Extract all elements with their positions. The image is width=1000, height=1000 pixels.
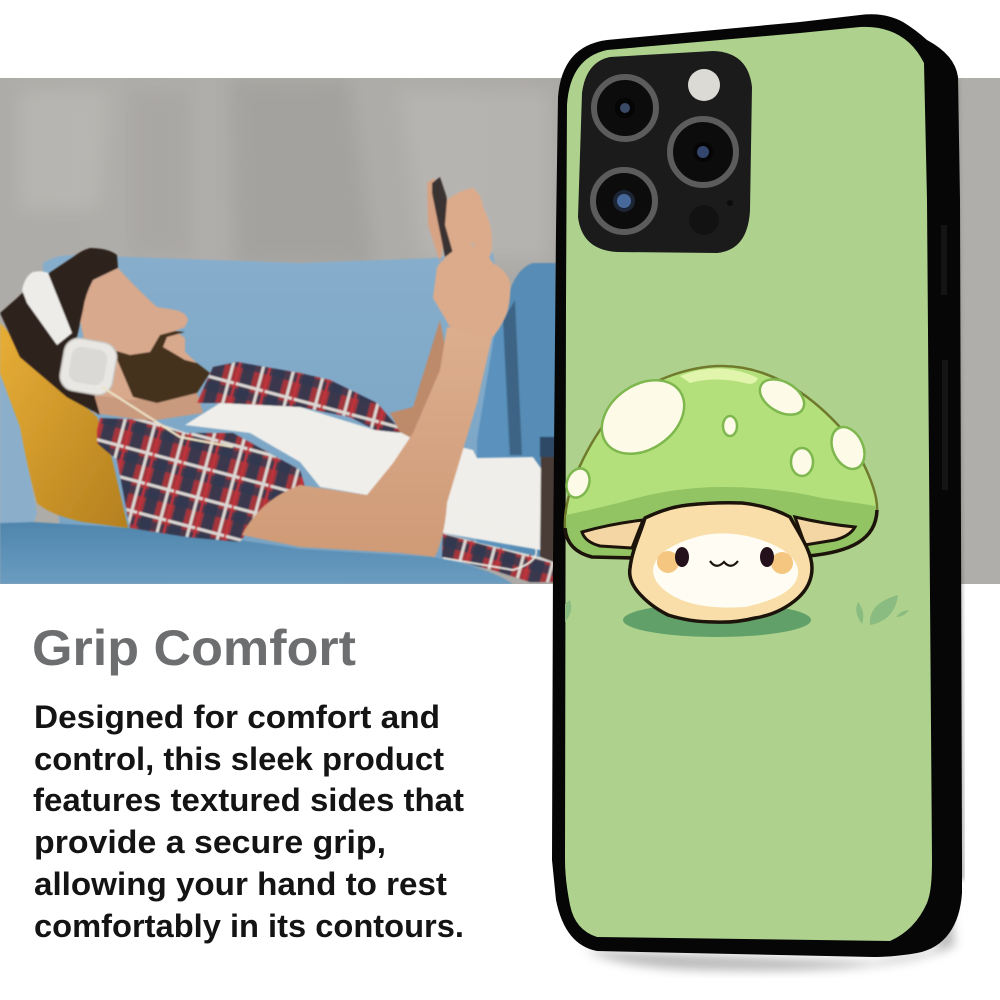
fist xyxy=(433,243,510,340)
description text xyxy=(33,699,464,944)
eyes xyxy=(675,547,689,567)
neck xyxy=(92,392,204,421)
sofa seat xyxy=(0,522,513,584)
description text: Designed for comfort and xyxy=(34,699,440,735)
case shadow xyxy=(585,900,955,971)
mushroom illustration xyxy=(563,365,909,637)
description text: comfortably in its contours. xyxy=(34,908,464,944)
sofa xyxy=(0,253,556,584)
sofa left arm xyxy=(0,373,37,525)
cable xyxy=(102,387,233,447)
front arm xyxy=(242,327,493,557)
head xyxy=(80,268,197,400)
cap lower outline xyxy=(565,510,877,558)
headphones xyxy=(22,271,233,447)
face highlight xyxy=(653,533,798,608)
headband xyxy=(22,271,72,345)
hair xyxy=(0,248,118,415)
cheeks xyxy=(657,551,679,573)
phone case xyxy=(552,14,964,971)
sofa armrest xyxy=(503,263,556,570)
lens bottom left xyxy=(593,170,655,232)
green back xyxy=(565,27,932,941)
description text: allowing your hand to rest xyxy=(34,866,447,902)
white t-shirt xyxy=(185,403,542,550)
lens right xyxy=(670,119,736,185)
beard xyxy=(113,331,210,403)
case body xyxy=(552,14,962,957)
cushion xyxy=(0,323,128,528)
fingers xyxy=(445,188,492,262)
right gill xyxy=(795,517,855,545)
microphone xyxy=(727,200,733,206)
dark jeans xyxy=(540,437,556,457)
cap highlight xyxy=(680,368,758,384)
camera module xyxy=(578,51,752,253)
heading: Grip Comfort xyxy=(32,620,356,676)
ear cup xyxy=(58,336,119,397)
description text: features textured sides that xyxy=(33,782,464,818)
plaid collar xyxy=(197,362,403,433)
description text: control, this sleek product xyxy=(34,741,444,777)
lens top left xyxy=(594,77,656,139)
cap spots xyxy=(563,365,871,501)
sofa back xyxy=(43,253,510,570)
smartphone xyxy=(432,177,457,257)
right edge shadow xyxy=(956,80,964,880)
plaid hem xyxy=(442,533,556,582)
cable lower xyxy=(442,548,538,572)
photo: man relaxing on a sofa with a phone xyxy=(0,78,1000,584)
sensor xyxy=(689,205,719,235)
plaid shirt xyxy=(97,418,305,542)
mouth xyxy=(710,561,738,566)
left gill xyxy=(582,520,643,548)
side buttons xyxy=(941,225,947,295)
grass leaves right xyxy=(856,595,909,625)
ground shadow xyxy=(623,603,811,637)
cap lower shade xyxy=(566,487,876,556)
flash xyxy=(688,69,720,101)
cap xyxy=(565,366,877,557)
back arm xyxy=(390,320,450,440)
concrete wall background xyxy=(0,78,1000,584)
grass left xyxy=(565,600,571,622)
man xyxy=(0,177,556,582)
hand behind phone xyxy=(427,178,445,262)
description text: provide a secure grip, xyxy=(34,824,386,860)
stem and face xyxy=(630,503,812,622)
